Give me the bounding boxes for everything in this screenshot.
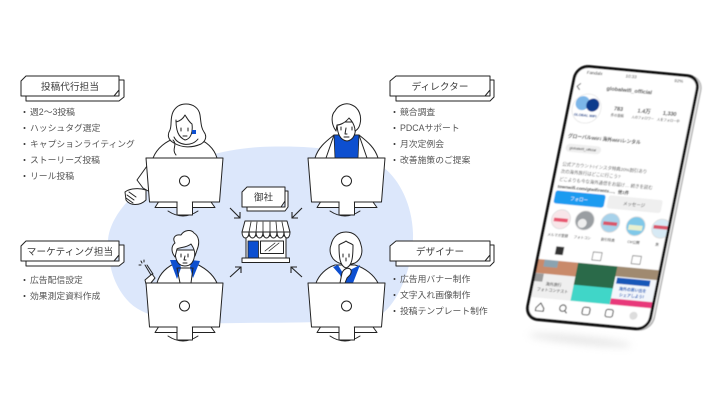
panel: posting agent xyxy=(21,76,135,181)
heading: posting agent: 投稿代行担当 xyxy=(41,81,99,93)
task list: marketing: 効果測定資料作成 xyxy=(30,290,101,301)
shop door xyxy=(248,241,258,258)
task list: designer: 投稿テンプレート制作 xyxy=(400,305,488,316)
profile bio: どこよりも今な海外通信をお届け… 続きを読む xyxy=(558,175,654,191)
heading: director: ディレクター xyxy=(411,81,469,93)
profile stats: 1.4万 xyxy=(637,107,652,116)
post grid: 海外の思い出を xyxy=(619,285,647,293)
avatar: GLOBAL WiFi xyxy=(573,113,597,119)
story labels: フォトコン xyxy=(573,234,592,240)
arrow: bottom right xyxy=(291,267,302,277)
profile username: globalwifi_official xyxy=(606,86,653,96)
task list: marketing xyxy=(24,274,101,301)
story labels: 旅 xyxy=(655,241,660,247)
illustration: director at computer xyxy=(308,104,385,216)
follow button xyxy=(553,190,606,208)
icon: shop xyxy=(242,221,290,262)
story labels: Ctrl公開 xyxy=(627,239,641,245)
shop window xyxy=(260,241,284,254)
profile stats xyxy=(610,105,682,123)
story highlights xyxy=(550,208,673,239)
task list: posting agent xyxy=(24,106,135,181)
profile stats: 人のフォロワー xyxy=(631,114,655,121)
panel: director xyxy=(390,76,494,165)
task list: posting agent: 週2〜3投稿 xyxy=(30,106,75,117)
status bar: Fandalx xyxy=(586,70,604,76)
profile stats: 1,330 xyxy=(662,111,677,118)
panel: marketing xyxy=(21,241,124,301)
task list: director: 月次定例会 xyxy=(400,138,444,149)
task list: director xyxy=(394,106,471,165)
background blob xyxy=(108,146,413,323)
back chevron xyxy=(576,83,581,90)
arrow: top right xyxy=(292,208,302,218)
monitor xyxy=(146,283,223,341)
story labels: メルマガ登録 xyxy=(547,231,569,238)
post grid xyxy=(531,259,659,308)
phone shadow xyxy=(528,331,632,349)
profile stats: 783 xyxy=(613,106,624,113)
story labels: 割引特典 xyxy=(601,236,616,243)
task list: posting agent: リール投稿 xyxy=(30,170,74,181)
arrow: top left xyxy=(230,208,240,218)
task list: posting agent: ストーリーズ投稿 xyxy=(30,154,100,165)
heading: marketing: マーケティング担当 xyxy=(27,246,113,258)
profile stats: 件の投稿 xyxy=(610,112,625,118)
status bar xyxy=(586,70,684,84)
shop awning xyxy=(242,221,290,238)
threads chip: globalwifi_official xyxy=(569,146,596,153)
task list: director: PDCAサポート xyxy=(400,123,460,133)
smartphone mockup xyxy=(523,64,704,332)
message button xyxy=(606,195,663,213)
illustration scene xyxy=(21,76,494,341)
profile bio: townwifi.com/gtwifirents…、他1件 xyxy=(557,183,630,197)
message button: メッセージ xyxy=(623,201,646,208)
heading: designer: デザイナー xyxy=(416,246,464,258)
task list: posting agent: ハッシュタグ選定 xyxy=(30,122,101,133)
illustration: woman at computer xyxy=(125,104,223,216)
tab icons xyxy=(554,246,642,264)
post grid: 海外旅行 xyxy=(545,280,562,288)
task list: posting agent: キャプションライティング xyxy=(30,138,135,149)
status bar: 10:33 xyxy=(625,74,638,80)
task list: designer xyxy=(394,273,488,316)
arrow: bottom left xyxy=(230,267,241,277)
profile bio: 公式アカウント!インスタ特典20%割引あり xyxy=(562,160,648,175)
post grid: シェアしよう! xyxy=(619,291,645,299)
task list: marketing: 広告配信設定 xyxy=(30,274,83,285)
illustration: marketer at computer xyxy=(139,231,223,341)
threads chip xyxy=(566,144,601,154)
task list: designer: 文字入れ画像制作 xyxy=(400,289,471,300)
phone body xyxy=(523,64,704,332)
illustration: designer at computer xyxy=(308,232,385,341)
story labels xyxy=(547,233,660,246)
label: your company xyxy=(242,187,288,211)
label: your company: 御社 xyxy=(254,192,273,204)
monitor xyxy=(308,283,385,341)
monitor xyxy=(146,158,223,216)
avatar xyxy=(572,94,602,124)
profile name: グローバルWiFi 海外WiFiレンタル xyxy=(567,132,642,146)
panel: designer xyxy=(390,241,494,316)
monitor xyxy=(308,158,385,216)
post grid: フォトコンテスト xyxy=(536,285,569,294)
profile bio: 次の海外旅行はどこに行こう? xyxy=(560,168,622,180)
task list: designer: 広告用バナー制作 xyxy=(400,273,471,284)
profile bio xyxy=(557,161,653,196)
task list: director: 競合調査 xyxy=(400,106,435,117)
task list: director: 改善施策のご提案 xyxy=(400,154,471,165)
follow button: フォロー xyxy=(570,196,589,203)
status bar: 92% xyxy=(674,78,684,84)
profile stats: 人をフォロー中 xyxy=(657,116,680,123)
bottom navigation xyxy=(535,302,638,320)
phone screen xyxy=(527,67,701,329)
